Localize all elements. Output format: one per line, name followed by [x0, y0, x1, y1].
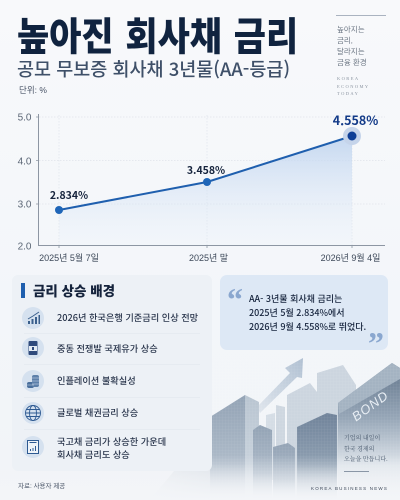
panel: rate rise background: [12, 275, 212, 471]
callout text: [249, 292, 366, 333]
icon: oil barrel: [22, 337, 44, 359]
item 2: 중동 전쟁발 국제유가 상승: [57, 341, 158, 355]
line chart: 2025년 말: [189, 252, 228, 263]
opening quote mark: “: [227, 281, 243, 317]
side note: tagline: 높아지는: [337, 25, 365, 34]
image caption: [344, 434, 388, 463]
item 5: 회사채 금리도 상승: [57, 446, 130, 460]
side note: tagline: 금융 환경: [337, 58, 367, 67]
item 3: 인플레이션 불확실성: [57, 373, 136, 387]
icon: globe: [22, 402, 44, 424]
icon: coin stacks: [22, 370, 44, 392]
item 1: 2026년 한국은행 기준금리 인상 전망: [57, 310, 198, 324]
BOND sign: BOND: [349, 388, 391, 424]
image caption: 기업의 내일이: [344, 436, 380, 442]
side note: tagline: [336, 15, 386, 95]
line chart: 4.558%: [333, 110, 378, 129]
credit: KOREA BUSINESS NEWS: [311, 486, 388, 491]
title: 높아진 회사채 금리: [17, 6, 298, 63]
line chart: [18, 110, 385, 263]
line chart: 4.0: [18, 157, 32, 168]
line chart: 5.0: [18, 113, 32, 124]
side note: tagline: ECONOMY: [337, 84, 370, 88]
item 4: 글로벌 채권금리 상승: [57, 405, 138, 419]
caption rule: [344, 471, 369, 472]
side note: tagline: KOREA: [337, 76, 360, 81]
line chart: 2.0: [18, 242, 32, 253]
item 5: [57, 434, 166, 460]
line chart: 2.834%: [50, 188, 88, 203]
callout text: 2025년 5월 2.834%에서: [249, 306, 344, 319]
side note: tagline: 달라지는: [337, 47, 365, 56]
line chart: 2025년 5월 7일: [39, 252, 99, 263]
line chart: 2026년 9월 4일: [321, 252, 380, 263]
image caption: 한국 경제의: [344, 446, 374, 452]
callout text: 2026년 9월 4.558%로 뛰었다.: [249, 320, 366, 333]
unit label: 단위: %: [19, 85, 47, 95]
icon: rising bars: [22, 307, 44, 329]
callout text: AA- 3년물 회사채 금리는: [249, 292, 342, 305]
line chart: 3.0: [18, 200, 32, 211]
source: 자료: 사용자 제공: [18, 483, 65, 490]
item 5: 국고채 금리가 상승한 가운데: [57, 434, 166, 448]
callout: [220, 275, 388, 350]
side note: tagline: 금리,: [337, 36, 353, 45]
image caption: 오늘을 만듭니다.: [344, 457, 388, 463]
subtitle: 공모 무보증 회사채 3년물(AA-등급): [17, 56, 290, 82]
closing quote mark: ”: [368, 325, 384, 361]
icon: report chart: [22, 436, 44, 458]
line chart: 3.458%: [187, 163, 225, 178]
side note: tagline: TODAY: [337, 91, 359, 96]
panel heading: 금리 상승 배경: [33, 280, 115, 300]
panel accent bar: [21, 283, 25, 298]
